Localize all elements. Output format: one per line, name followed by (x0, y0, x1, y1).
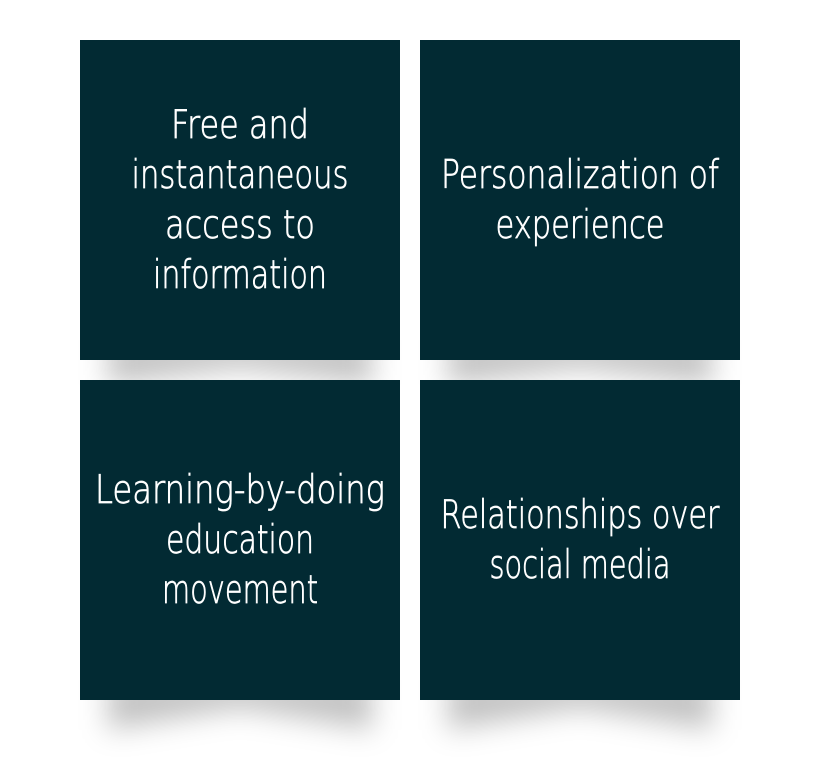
text: learning-by-doing education movement: education (166, 518, 314, 563)
text: free and instantaneous access to information: instantaneous (132, 153, 348, 198)
card shadow: top right (448, 340, 712, 385)
text: personalization of experience (441, 153, 719, 248)
text: free and instantaneous access to information (132, 103, 348, 298)
card shadow: bottom right (448, 680, 712, 730)
card shadow: bottom left (108, 680, 372, 730)
text: learning-by-doing education movement: movement (162, 568, 318, 613)
text: free and instantaneous access to information: access to (165, 203, 315, 248)
text: free and instantaneous access to information: information (153, 253, 327, 298)
text: relationships over social media (440, 493, 720, 588)
text: relationships over social media: social media (490, 543, 670, 588)
text: personalization of experience: experience (496, 203, 664, 248)
text: free and instantaneous access to information: Free and (171, 103, 309, 148)
panel: learning by doing (80, 380, 400, 700)
panel: personalization (420, 40, 740, 360)
text: learning-by-doing education movement: Learning-by-doing (95, 468, 385, 513)
panel: relationships (420, 380, 740, 700)
text: relationships over social media: Relationships over (440, 493, 720, 538)
text: learning-by-doing education movement (95, 468, 385, 613)
card shadow: top left (108, 340, 372, 385)
panel: free and instantaneous access (80, 40, 400, 360)
text: personalization of experience: Personalization of (441, 153, 719, 198)
